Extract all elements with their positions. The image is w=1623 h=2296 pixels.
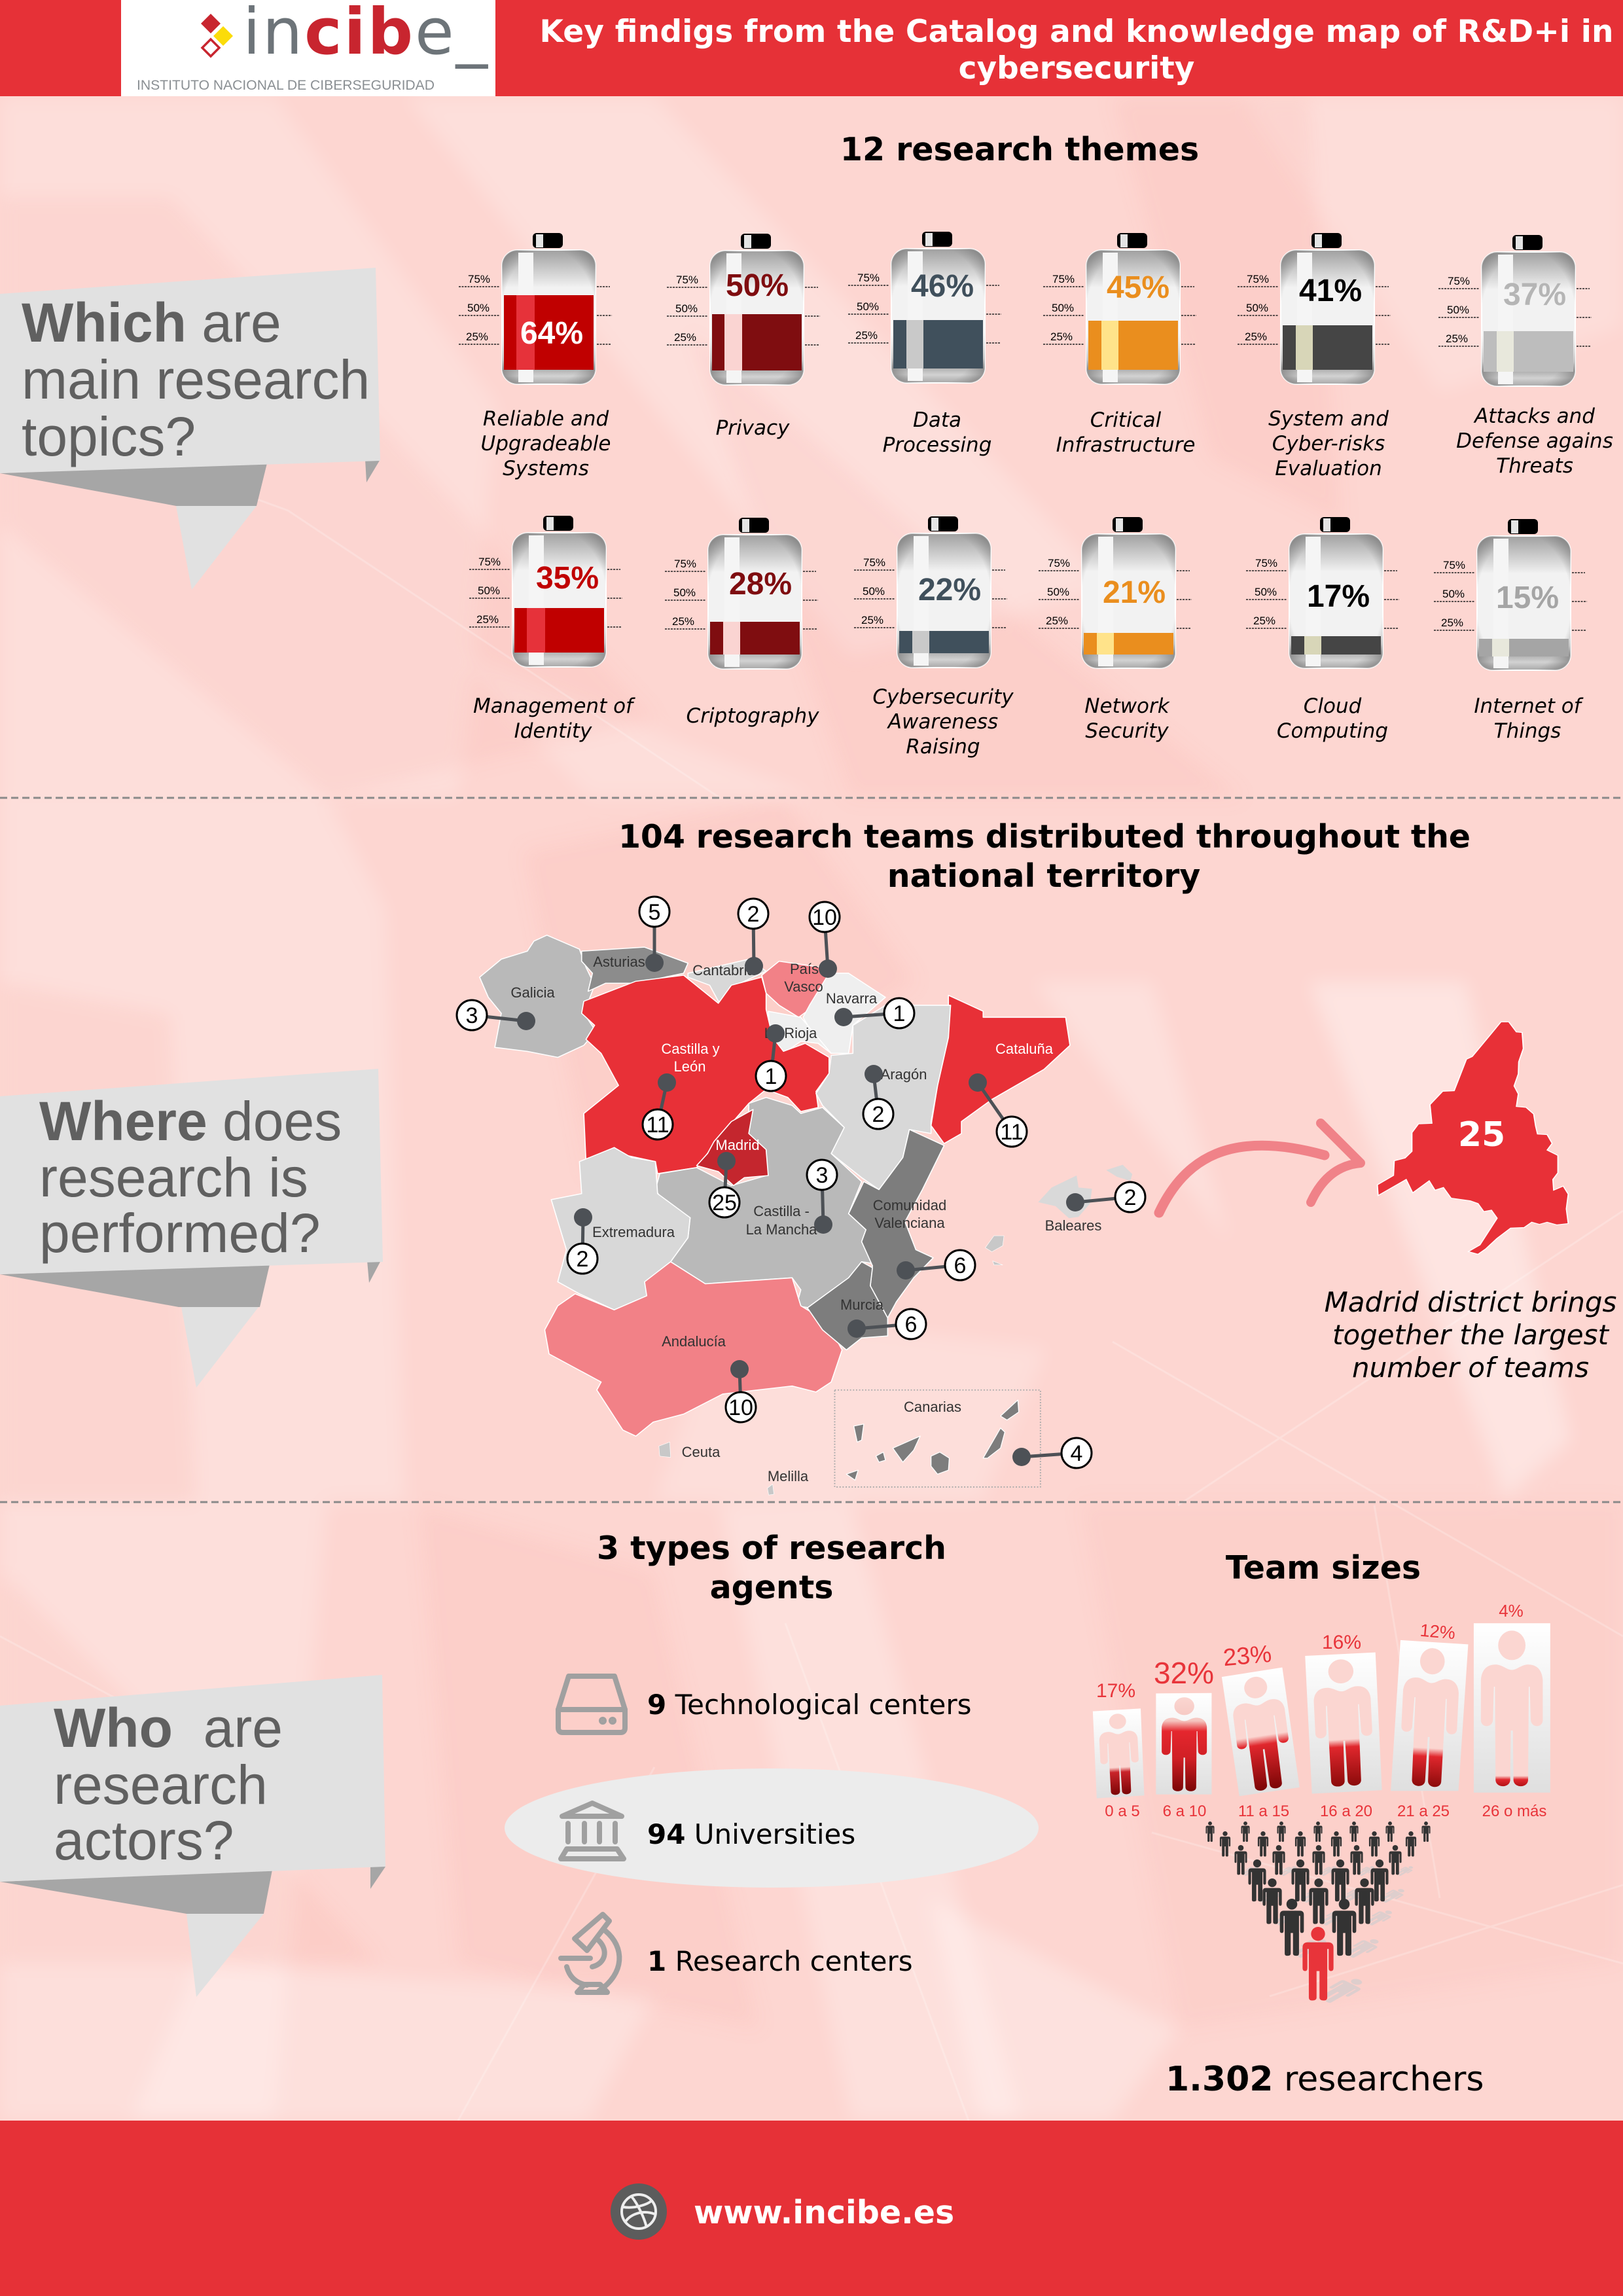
- section banner: who are research actors: Who are: [54, 1697, 283, 1759]
- card: 6 a 10: [1156, 1693, 1211, 1795]
- section banner: which are main research topics: topics?: [22, 406, 196, 467]
- battery: cybersecurity awareness 22%: 22%: [918, 573, 981, 607]
- battery: privacy 50%: Privacy: [716, 416, 790, 440]
- battery: criptography 28%: 28%: [729, 567, 792, 601]
- battery: cloud computing 17%: 17%: [1307, 579, 1370, 614]
- percentages: 12%: [1419, 1621, 1456, 1643]
- map callouts: 3: [816, 1163, 828, 1188]
- footer bar: [0, 2121, 1623, 2296]
- stat: 1.302 researchers: 1.302 researchers: [1166, 2060, 1484, 2099]
- arrow to Madrid: [1159, 1123, 1361, 1213]
- percentages: 4%: [1499, 1601, 1524, 1621]
- map callouts: 6: [905, 1312, 917, 1337]
- battery: network security 21%: Security: [1085, 719, 1169, 743]
- section banner: which are main research topics: Which are: [22, 292, 281, 353]
- region labels: Baleares: [1045, 1217, 1101, 1234]
- region labels: Comunidad: [873, 1197, 946, 1213]
- battery: attacks and defense 37%: 37%: [1503, 278, 1566, 312]
- battery: critical infrastructure 45%: Critical: [1090, 408, 1162, 432]
- region labels: País: [790, 961, 819, 977]
- battery: privacy 50%: [667, 234, 820, 440]
- section banner: who are research actors: research: [54, 1754, 268, 1816]
- map callouts: 4: [1071, 1441, 1082, 1466]
- team size ranges: 6 a 10: [1163, 1803, 1206, 1820]
- map callouts: 10: [812, 905, 837, 930]
- icon: university building: [561, 1803, 624, 1859]
- map callouts: 1: [765, 1064, 777, 1089]
- heading: 3 types of research agents: [597, 1530, 946, 1606]
- heading: 3 types of research agents: 3 types of research: [597, 1530, 946, 1567]
- region labels: Ceuta: [682, 1444, 721, 1460]
- section banner: which are main research topics: [0, 268, 380, 590]
- icon: microscope: [561, 1914, 619, 1992]
- region labels: Extremadura: [592, 1224, 675, 1240]
- logo: incibe: [121, 0, 495, 96]
- battery: attacks and defense 37%: Defense agains: [1456, 429, 1613, 453]
- map callouts: 2: [1124, 1185, 1136, 1210]
- region labels: Murcia: [840, 1297, 884, 1313]
- region labels: Andalucía: [662, 1333, 726, 1350]
- region labels: [510, 954, 1101, 1484]
- region labels: Navarra: [826, 990, 878, 1007]
- region labels: Cantabria: [692, 962, 755, 978]
- battery: network security 21%: [1039, 517, 1192, 743]
- percentages: [1096, 1601, 1524, 1702]
- map callouts: 6: [954, 1253, 966, 1278]
- team size ranges: 0 a 5: [1105, 1803, 1140, 1820]
- battery: data processing 46%: Data: [913, 408, 961, 432]
- battery: reliable 64%: Systems: [503, 457, 589, 480]
- card: 16 a 20: [1305, 1653, 1382, 1794]
- region labels: Castilla -: [753, 1203, 810, 1219]
- Madrid caption: together the largest: [1332, 1319, 1610, 1351]
- team size ranges: 26 o más: [1482, 1803, 1546, 1820]
- map callouts: 2: [577, 1247, 588, 1272]
- logo: incibe: INSTITUTO NACIONAL DE CIBERSEGURIDAD: [137, 78, 435, 93]
- card: 21 a 25: [1391, 1640, 1468, 1791]
- header bar: [0, 0, 1623, 96]
- battery: cybersecurity awareness 22%: [854, 516, 1014, 759]
- team size ranges: 21 a 25: [1397, 1803, 1450, 1820]
- map callouts: 10: [728, 1395, 753, 1420]
- battery: system and cyber-risks 41%: Cyber-risks: [1272, 432, 1385, 456]
- battery: attacks and defense 37%: Attacks and: [1473, 404, 1595, 428]
- battery: attacks and defense 37%: Threats: [1496, 454, 1573, 478]
- map callouts: 11: [646, 1113, 669, 1138]
- region labels: Galicia: [510, 984, 555, 1001]
- heading: 104 research teams: [618, 818, 1471, 895]
- card: 11 a 15: [1222, 1668, 1300, 1796]
- Madrid caption: number of teams: [1352, 1352, 1589, 1384]
- battery: cloud computing 17%: [1246, 517, 1399, 743]
- heading: 104 research teams: 104 research teams distributed throughout the: [618, 818, 1471, 855]
- map of Spain: [457, 897, 1145, 1495]
- section banner: who are research actors: [0, 1675, 385, 1997]
- section banner: where does research is performed: Where does: [39, 1090, 342, 1152]
- Baleares islands: [1038, 1165, 1132, 1218]
- region labels: Valenciana: [874, 1215, 945, 1231]
- title: [539, 14, 1614, 86]
- battery: management of identity 35%: Management of: [473, 694, 635, 718]
- battery: cybersecurity awareness 22%: Raising: [906, 735, 980, 759]
- battery: attacks and defense 37%: [1438, 235, 1613, 478]
- region labels: Asturias: [593, 954, 645, 970]
- card: 0 a 5: [1093, 1708, 1144, 1798]
- battery: internet of things 15%: Things: [1494, 719, 1561, 743]
- battery: data processing 46%: [848, 232, 1001, 457]
- battery: system and cyber-risks 41%: System and: [1268, 407, 1389, 431]
- heading: 104 research teams: national territory: [887, 857, 1200, 895]
- battery: privacy 50%: 50%: [726, 268, 789, 303]
- battery: data processing 46%: 46%: [911, 269, 974, 304]
- battery: internet of things 15%: [1434, 519, 1587, 743]
- battery: data processing 46%: Processing: [883, 433, 991, 457]
- agent: research centers: 1 Research centers: [647, 1945, 913, 1977]
- region labels: La Rioja: [764, 1025, 817, 1041]
- chart: team sizes cards: [1093, 1601, 1550, 1820]
- people crowd pictogram: [1205, 1821, 1431, 2005]
- card: 26 o más: [1474, 1623, 1550, 1793]
- battery: network security 21%: Network: [1084, 694, 1170, 718]
- battery: cybersecurity awareness 22%: Awareness: [887, 710, 998, 734]
- battery: internet of things 15%: Internet of: [1474, 694, 1584, 718]
- battery: reliable 64%: Upgradeable: [481, 432, 611, 456]
- region labels: Aragón: [881, 1066, 927, 1083]
- battery: cybersecurity awareness 22%: Cybersecurity: [872, 685, 1014, 709]
- battery: system and cyber-risks 41%: [1238, 233, 1391, 480]
- battery: management of identity 35%: 35%: [536, 561, 599, 596]
- heading: team sizes: Team sizes: [1226, 1549, 1421, 1587]
- battery: reliable 64%: 64%: [520, 316, 583, 351]
- heading: 3 types of research agents: agents: [710, 1569, 833, 1606]
- map regions: [480, 935, 1070, 1495]
- agent: universities: 94 Universities: [647, 1818, 855, 1850]
- section banner: who are research actors: actors?: [54, 1810, 234, 1871]
- region labels: Vasco: [784, 978, 823, 995]
- section banner: which are main research topics: main research: [22, 349, 370, 410]
- percentages: 16%: [1322, 1632, 1361, 1653]
- region labels: Cataluña: [995, 1041, 1054, 1057]
- region labels: Castilla y: [661, 1041, 720, 1057]
- battery: reliable 64%: Reliable and: [483, 407, 609, 431]
- website url: www.incibe.es: [694, 2194, 954, 2231]
- battery: cloud computing 17%: Computing: [1277, 719, 1388, 743]
- Madrid detail: 25: [1458, 1115, 1505, 1155]
- title: Key findigs from the Catalog and knowledge map of R&D+i in: [539, 14, 1614, 50]
- percentages: 17%: [1096, 1680, 1135, 1702]
- battery: cloud computing 17%: Cloud: [1304, 694, 1362, 718]
- battery: reliable 64%: [459, 233, 612, 480]
- battery: management of identity 35%: Identity: [514, 719, 592, 743]
- map callouts: [457, 897, 1145, 1468]
- map callouts: 1: [893, 1001, 905, 1026]
- battery: critical infrastructure 45%: 45%: [1107, 270, 1169, 305]
- battery: criptography 28%: [665, 518, 819, 728]
- battery: management of identity 35%: [469, 516, 635, 743]
- region labels: León: [674, 1058, 705, 1075]
- battery: system and cyber-risks 41%: Evaluation: [1275, 457, 1382, 480]
- region labels: Canarias: [904, 1399, 961, 1415]
- battery: network security 21%: 21%: [1103, 575, 1166, 610]
- highlight ellipse: universities: [505, 1768, 1039, 1888]
- map callouts: 2: [747, 902, 759, 927]
- map callouts: 2: [872, 1102, 884, 1127]
- map callouts: 25: [712, 1191, 737, 1215]
- heading: 12 research themes: 12 research themes: [840, 131, 1199, 168]
- map callouts: 3: [466, 1003, 478, 1028]
- section banner: where does research is performed: research is: [39, 1147, 308, 1208]
- section banner: where does research is performed: performed?: [39, 1202, 321, 1264]
- agent: technological centers: [558, 1676, 972, 1732]
- battery: internet of things 15%: 15%: [1496, 581, 1559, 615]
- map callouts: 5: [649, 900, 660, 925]
- battery: critical infrastructure 45%: [1043, 233, 1196, 457]
- icon: hard drive: [558, 1676, 625, 1732]
- section banner: where does research is performed: [0, 1069, 383, 1388]
- title: cybersecurity: [959, 50, 1194, 86]
- agent: technological centers: 9 Technological centers: [647, 1689, 972, 1721]
- battery: system and cyber-risks 41%: 41%: [1299, 274, 1362, 308]
- region labels: Madrid: [715, 1137, 760, 1153]
- battery: criptography 28%: Criptography: [687, 704, 819, 728]
- Madrid detail: [1378, 1022, 1568, 1254]
- region labels: Melilla: [768, 1468, 809, 1484]
- team size ranges: 16 a 20: [1320, 1803, 1372, 1820]
- percentages: 23%: [1222, 1640, 1273, 1671]
- agent: universities: [561, 1803, 855, 1859]
- Madrid caption: Madrid district brings: [1325, 1286, 1616, 1318]
- map callouts: 11: [1000, 1120, 1024, 1145]
- battery: critical infrastructure 45%: Infrastructure: [1056, 433, 1195, 457]
- team size ranges: 11 a 15: [1238, 1803, 1289, 1820]
- region labels: La Mancha: [746, 1221, 817, 1238]
- agent: research centers: [561, 1914, 913, 1992]
- team size ranges: [1105, 1803, 1546, 1820]
- icon: globe ball: [611, 2183, 667, 2240]
- percentages: 32%: [1154, 1656, 1214, 1690]
- Madrid caption: [1325, 1286, 1616, 1384]
